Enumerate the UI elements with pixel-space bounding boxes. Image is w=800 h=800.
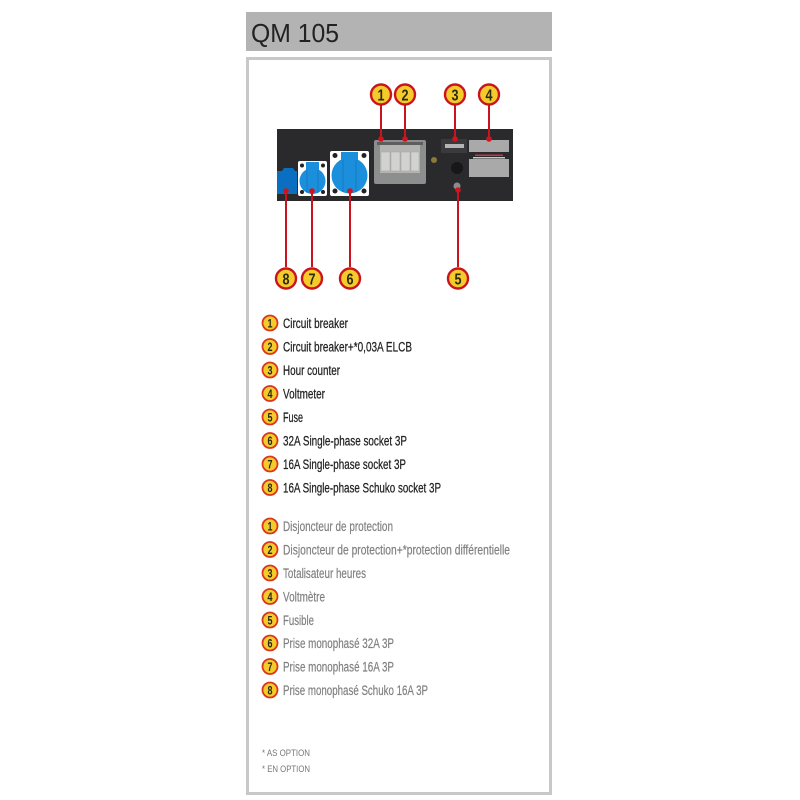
- footnotes: [262, 748, 310, 775]
- legend: French: Voltmètre: [283, 590, 325, 604]
- legend: English: [262, 316, 441, 496]
- legend: English: Hour counter: [283, 363, 340, 378]
- legend: French: Prise monophasé Schuko 16A 3P: [283, 683, 428, 698]
- legend: French: 8: [268, 683, 273, 697]
- socket: 32A: [330, 151, 369, 196]
- socket: 16A: [298, 161, 327, 196]
- legend: French: 2: [268, 543, 273, 557]
- title bar: [246, 12, 552, 51]
- legend: English: 3: [268, 363, 273, 377]
- footnotes: * EN OPTION: [262, 764, 310, 775]
- legend: English: Circuit breaker: [283, 316, 348, 331]
- callout lines and numbered markers: 5: [454, 272, 462, 288]
- legend: French: Disjoncteur de protection: [283, 519, 393, 534]
- panel: generator control panel: [277, 129, 513, 201]
- legend: English: 1: [268, 316, 273, 330]
- legend: English: 16A Single-phase Schuko socket 3P: [283, 480, 441, 496]
- legend: French: 6: [268, 636, 273, 650]
- legend: English: 32A Single-phase socket 3P: [283, 434, 407, 448]
- callout lines and numbered markers: 4: [486, 88, 493, 104]
- callout lines and numbered markers: 1: [378, 88, 385, 104]
- legend: French: 7: [268, 660, 273, 674]
- hour counter: [441, 139, 467, 153]
- content frame: [248, 58, 550, 794]
- callout lines and numbered markers: 3: [452, 88, 459, 104]
- legend: English: 2: [268, 340, 273, 354]
- legend: French: 4: [268, 590, 273, 604]
- legend: English: Circuit breaker+*0,03A ELCB: [283, 340, 412, 354]
- legend: English: 4: [268, 387, 273, 401]
- screw: [431, 157, 437, 163]
- legend: French: 3: [268, 566, 273, 580]
- footnotes: * AS OPTION: [262, 748, 310, 759]
- callout lines and numbered markers: 6: [346, 272, 354, 288]
- legend: French: 5: [268, 613, 273, 627]
- legend: English: 5: [268, 410, 273, 424]
- callout lines and numbered markers: 7: [308, 272, 316, 288]
- legend: English: Fuse: [283, 410, 303, 425]
- socket: schuko 16A: [277, 168, 297, 194]
- round switch: [451, 162, 463, 174]
- legend: English: 16A Single-phase socket 3P: [283, 457, 406, 472]
- legend: French: Fusible: [283, 613, 314, 628]
- legend: French: Prise monophasé 32A 3P: [283, 636, 394, 651]
- callout lines and numbered markers: [276, 84, 499, 288]
- callout lines and numbered markers: 8: [282, 272, 290, 288]
- legend: French: 1: [268, 519, 273, 533]
- legend: English: 7: [268, 457, 273, 471]
- voltmeter: [469, 140, 509, 177]
- legend: French: Totalisateur heures: [283, 566, 366, 581]
- legend: English: 6: [268, 434, 273, 448]
- callout lines and numbered markers: 2: [402, 88, 409, 104]
- legend: French: [262, 518, 510, 698]
- title bar: QM 105: [251, 18, 339, 48]
- legend: French: Disjoncteur de protection+*protection différentielle: [283, 542, 510, 558]
- circuit breaker block: [374, 140, 426, 184]
- fuse holder: [454, 182, 460, 190]
- legend: English: 8: [268, 481, 273, 495]
- legend: English: Voltmeter: [283, 386, 325, 402]
- legend: French: Prise monophasé 16A 3P: [283, 660, 394, 674]
